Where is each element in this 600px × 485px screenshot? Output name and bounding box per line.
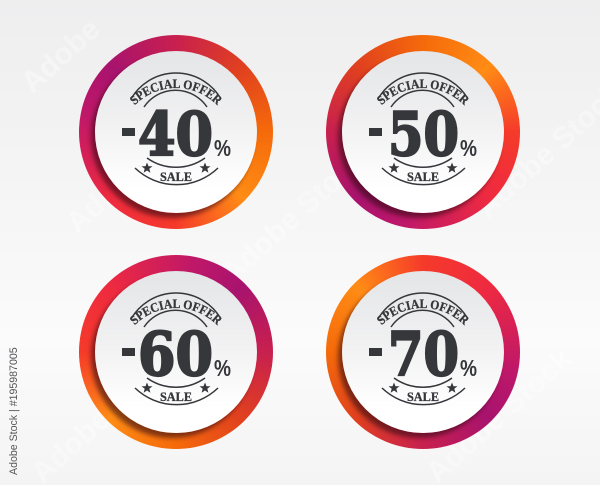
disk: white circle: [342, 51, 504, 213]
label group: special offer 40 percent sale: %: [214, 135, 231, 161]
badge: minus 40 percent: [79, 35, 273, 229]
ring: purple to orange gradient: [79, 255, 273, 449]
badge: minus 50 percent: [326, 35, 520, 229]
disk: white circle: [95, 51, 257, 213]
label group: special offer 60 percent sale: %: [214, 355, 231, 381]
label group: special offer 40 percent sale: 40: [138, 100, 213, 170]
label group: special offer 60 percent sale: SPECIAL OFFER: [130, 299, 222, 326]
badge: minus 60 percent: [79, 255, 273, 449]
ring: orange to purple gradient: [326, 255, 520, 449]
disk: white circle: [95, 271, 257, 433]
label group: special offer 40 percent sale: SPECIAL OFFER: [130, 79, 222, 106]
label group: special offer 50 percent sale: SALE: [407, 170, 439, 184]
label group: special offer 50 percent sale: [369, 72, 477, 186]
ring: purple to orange gradient: [79, 35, 273, 229]
label group: special offer 60 percent sale: [122, 292, 231, 406]
label group: special offer 50 percent sale: %: [460, 135, 477, 161]
label group: special offer 40 percent sale: [122, 72, 231, 186]
label group: special offer 70 percent sale: SALE: [407, 390, 439, 404]
label group: special offer 70 percent sale: 70: [388, 320, 459, 390]
label group: special offer 60 percent sale: SALE: [160, 390, 192, 404]
label group: special offer 40 percent sale: SALE: [160, 170, 192, 184]
label group: special offer 60 percent sale: 60: [138, 320, 213, 390]
text: Adobe Stock: [215, 142, 373, 290]
label group: special offer 70 percent sale: SPECIAL OFFER: [377, 299, 468, 326]
badge: minus 70 percent: [326, 255, 520, 449]
text: Adobe: [15, 13, 106, 100]
text: Adobe Stock: [60, 92, 218, 240]
disk: white circle: [342, 271, 504, 433]
label group: special offer 70 percent sale: %: [460, 355, 477, 381]
label group: special offer 50 percent sale: SPECIAL OFFER: [377, 79, 468, 106]
label group: special offer 70 percent sale: [369, 292, 477, 406]
label group: special offer 50 percent sale: 50: [388, 100, 459, 170]
ring: orange to purple gradient: [326, 35, 520, 229]
stock credit: vertical text: Adobe Stock | #195987005: [8, 347, 20, 475]
